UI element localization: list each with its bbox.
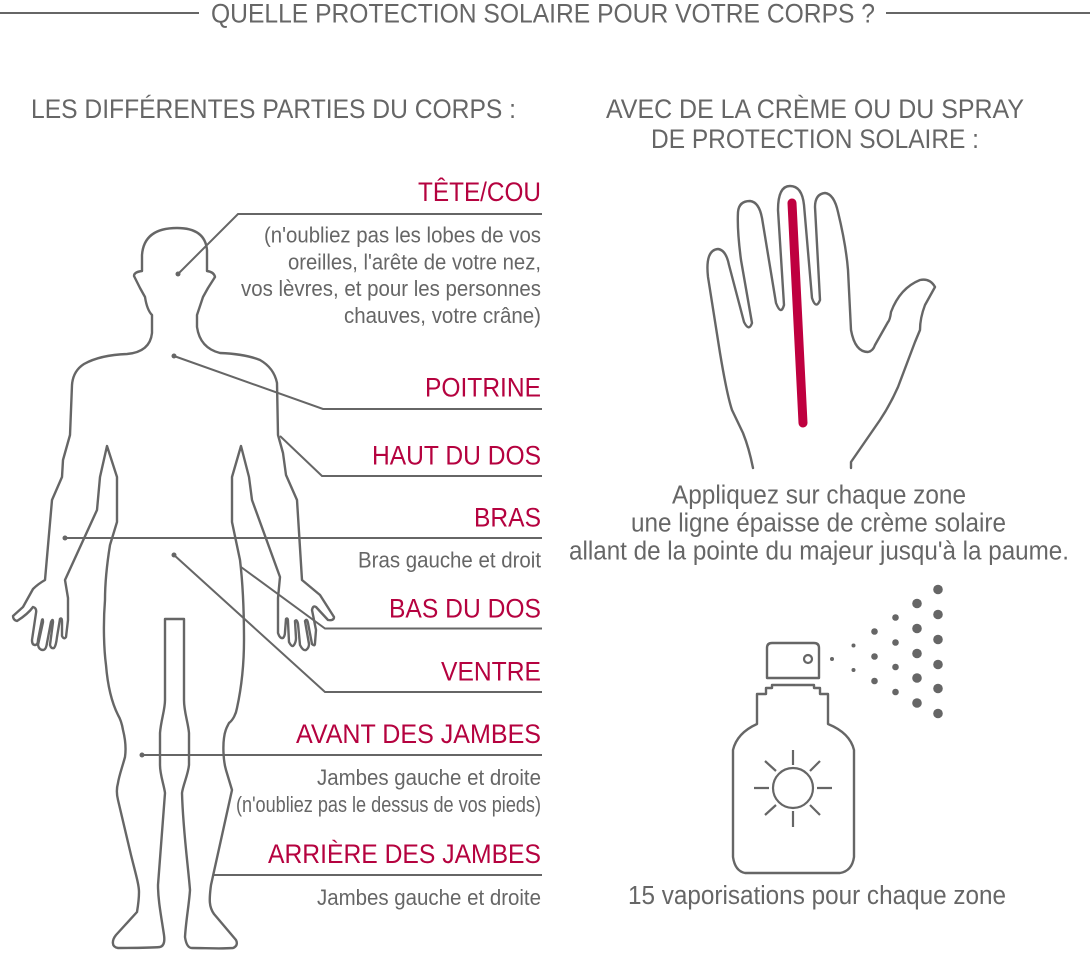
bottle body <box>733 685 854 873</box>
label: arrière des jambes: Jambes gauche et droite <box>317 885 541 910</box>
label: avant des jambes: AVANT DES JAMBES <box>296 719 541 749</box>
label: bas du dos <box>241 567 542 628</box>
icon: spray bottle <box>733 585 943 873</box>
label: bas du dos: BAS DU DOS <box>389 594 541 624</box>
label: ventre <box>172 552 542 692</box>
label: tête/cou: chauves, votre crâne) <box>344 303 541 328</box>
cream line <box>792 203 803 423</box>
text: cream instructions <box>569 482 1069 566</box>
label: tête/cou: vos lèvres, et pour les personnes <box>241 276 541 301</box>
spray droplets <box>830 585 943 718</box>
label: haut du dos: HAUT DU DOS <box>372 440 541 470</box>
heading: cream or spray column <box>606 94 1024 154</box>
text: cream instructions: allant de la pointe du majeur jusqu'à la paume. <box>569 538 1069 566</box>
heading: cream or spray column: AVEC DE LA CRÈME OU DU SPRAY <box>606 94 1024 124</box>
label: bras: BRAS <box>474 502 541 532</box>
label: ventre: VENTRE <box>441 656 541 686</box>
icon: hand with cream line <box>707 186 935 468</box>
icon: human body outline <box>13 228 334 948</box>
text: spray instructions: 15 vaporisations pour chaque zone <box>628 882 1006 910</box>
label: tête/cou <box>176 177 542 328</box>
text: cream instructions: Appliquez sur chaque zone <box>672 482 966 510</box>
heading: cream or spray column: DE PROTECTION SOLAIRE : <box>651 124 979 154</box>
label: avant des jambes <box>140 719 542 817</box>
text: cream instructions: une ligne épaisse de crème solaire <box>631 510 1006 538</box>
nozzle <box>804 655 812 663</box>
label: bras: Bras gauche et droit <box>358 548 542 572</box>
label: bras <box>62 502 542 572</box>
label: poitrine: POITRINE <box>425 372 541 402</box>
label: haut du dos <box>280 436 542 476</box>
label: arrière des jambes <box>214 839 542 910</box>
label: tête/cou: TÊTE/COU <box>418 177 541 207</box>
label: tête/cou: (n'oubliez pas les lobes de vos <box>264 222 541 248</box>
label: arrière des jambes: ARRIÈRE DES JAMBES <box>268 839 541 869</box>
spray cap <box>767 643 819 678</box>
label: tête/cou: oreilles, l'arête de votre nez, <box>288 250 541 274</box>
sun symbol <box>754 750 832 827</box>
label: avant des jambes: Jambes gauche et droite <box>317 765 541 790</box>
label: poitrine <box>172 354 542 409</box>
heading: body parts column: LES DIFFÉRENTES PARTIES DU CORPS : <box>31 94 516 124</box>
label: avant des jambes: (n'oubliez pas le dessus de vos pieds) <box>236 792 541 817</box>
